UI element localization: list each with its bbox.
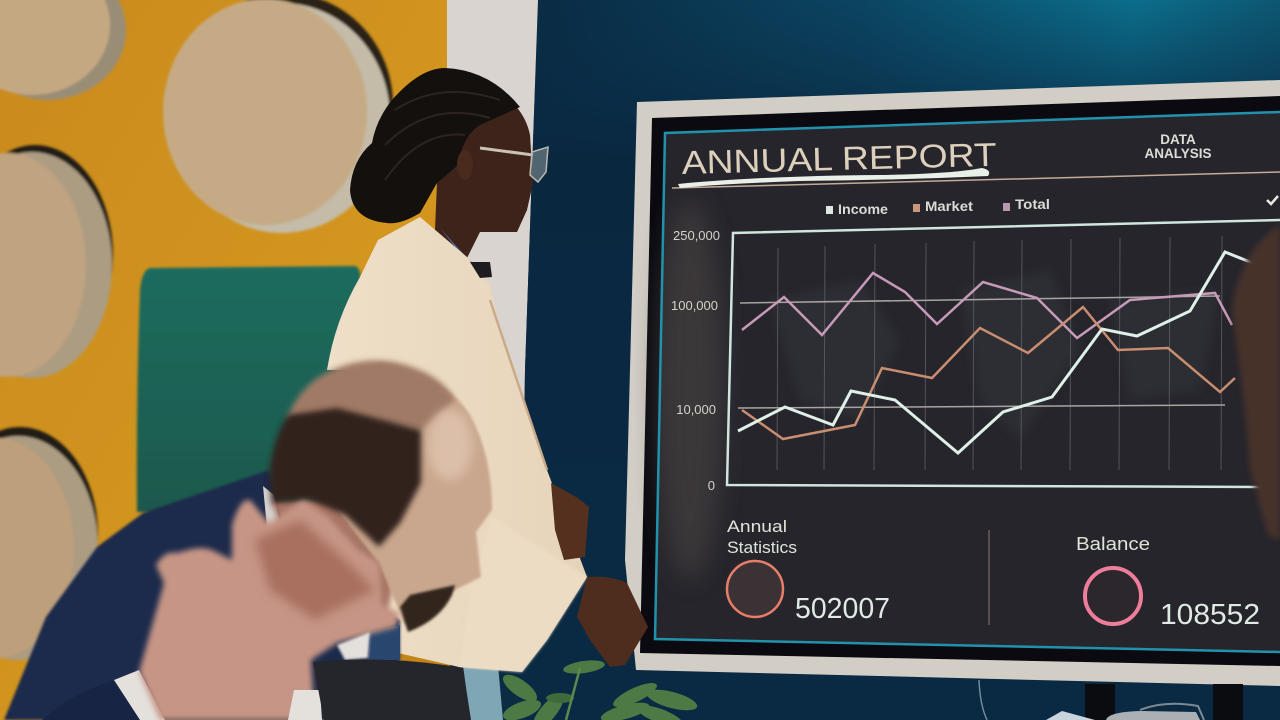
stat: annual statistics: 502007 xyxy=(795,593,890,625)
person: presenter xyxy=(327,68,648,720)
y axis labels: 250,000 xyxy=(673,228,720,243)
presenter: ear xyxy=(457,150,473,180)
label: Data Analysis xyxy=(1144,132,1212,161)
legend: Market xyxy=(925,198,973,214)
presenter: blazer seam xyxy=(490,300,547,470)
person: foreground right edge xyxy=(1232,225,1280,540)
y axis labels: 100,000 xyxy=(671,298,718,313)
person: seated man xyxy=(4,360,492,720)
man: bald crown xyxy=(286,360,455,430)
legend: Total xyxy=(1015,196,1050,212)
chart: world-map backdrop xyxy=(770,270,1220,440)
title: Annual Report: ANNUAL REPORT xyxy=(681,136,997,181)
presenter: black inner top xyxy=(470,262,492,278)
monitor xyxy=(625,80,1280,686)
chart: total line xyxy=(742,273,1232,338)
man: tie xyxy=(368,625,400,660)
man: head xyxy=(330,362,492,625)
presenter: raised hand xyxy=(551,483,589,560)
shirt: white cuff highlight xyxy=(337,632,370,660)
divider xyxy=(988,530,990,625)
hands: white cuff xyxy=(114,670,165,720)
chart: axis frame xyxy=(727,220,1280,487)
chart: vertical grid xyxy=(777,236,1222,470)
label: Data Analysis: DATA xyxy=(1160,132,1196,147)
title underline scribble xyxy=(678,168,989,188)
man: shirt collar xyxy=(263,486,285,560)
presenter: trousers xyxy=(463,665,503,720)
presenter: glasses xyxy=(480,147,548,182)
plant xyxy=(499,658,699,720)
wall panel: green square cushion xyxy=(137,266,360,520)
background: yellow wall xyxy=(0,0,450,720)
hands: finger shadows xyxy=(255,520,375,620)
person: clapping hands xyxy=(42,500,400,720)
presenter: lower hand xyxy=(577,577,648,667)
presenter: hair xyxy=(350,68,520,223)
chart: income line xyxy=(738,252,1255,453)
hands: dark sleeve xyxy=(42,680,165,720)
stat: balance: 108552 xyxy=(1160,599,1260,631)
stat: annual statistics: Annual xyxy=(727,517,787,536)
presenter: sleeve shadow xyxy=(459,517,587,672)
y axis labels xyxy=(671,228,720,493)
wall panel: middle left round cushion xyxy=(0,145,113,378)
chart: horizontal reference lines xyxy=(738,296,1225,408)
y axis labels: 10,000 xyxy=(676,402,716,417)
stat: balance: Balance xyxy=(1076,534,1150,554)
monitor: cyan screen outline xyxy=(655,112,1280,652)
chart: market line xyxy=(742,307,1235,439)
label: Data Analysis: ANALYSIS xyxy=(1144,146,1212,161)
monitor: screen panel xyxy=(655,112,1280,652)
y axis labels: 0 xyxy=(708,478,715,493)
background: white pillar xyxy=(447,0,547,420)
monitor: header rule xyxy=(672,172,1280,188)
hands: palms and fingers xyxy=(139,500,400,720)
line chart xyxy=(727,220,1280,487)
presenter: blazer xyxy=(327,217,587,672)
presenter: blouse xyxy=(440,228,490,277)
cable xyxy=(979,680,987,720)
man: neck xyxy=(270,500,400,620)
wall panel: top centre round cushion xyxy=(163,0,393,233)
monitor stand xyxy=(1085,684,1243,720)
shirt: white front xyxy=(288,690,322,720)
stat: annual statistics: Statistics xyxy=(727,538,797,557)
background: navy wall xyxy=(520,0,1280,720)
man: hair xyxy=(269,408,421,547)
legend xyxy=(826,196,1278,217)
monitor: white bezel xyxy=(625,80,1280,686)
stat: balance xyxy=(1076,534,1260,631)
object: dark cup xyxy=(313,660,471,720)
man: forehead highlight xyxy=(428,410,472,480)
wall panel: top left round cushion xyxy=(0,0,126,100)
stat: annual statistics xyxy=(727,517,890,625)
wall panel: lower left round cushion xyxy=(0,427,98,660)
man: navy suit xyxy=(4,470,400,720)
legend: Income xyxy=(838,201,888,217)
monitor: black frame xyxy=(640,96,1280,666)
presenter: neck and face xyxy=(435,100,533,258)
man: beard xyxy=(400,585,455,632)
monitor: reflection haze xyxy=(656,200,724,580)
equipment: bottom right device xyxy=(1046,704,1204,720)
